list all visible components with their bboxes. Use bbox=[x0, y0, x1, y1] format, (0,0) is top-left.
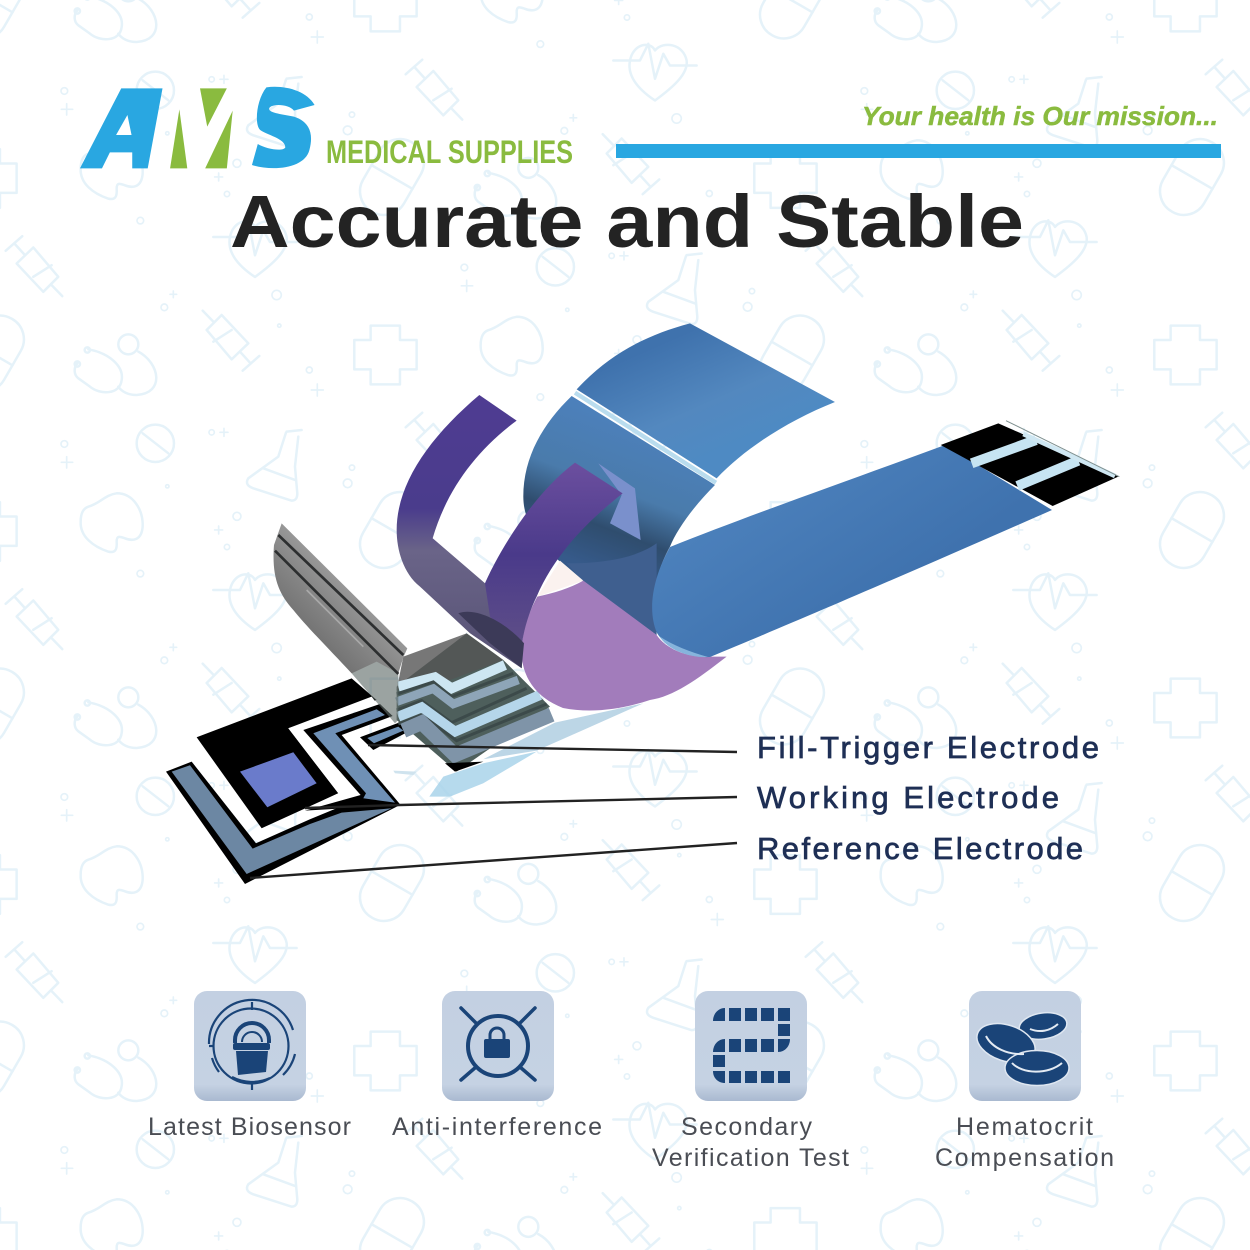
feature: secondary verification test bbox=[652, 991, 849, 1172]
caption: secondary verification test: Verification Test bbox=[652, 1144, 849, 1172]
logo wordmark: MEDICAL SUPPLIES bbox=[326, 134, 573, 170]
logo mark letters bbox=[80, 87, 315, 168]
caption: hematocrit compensation: Compensation bbox=[935, 1144, 1114, 1172]
leader lines bbox=[250, 745, 737, 878]
front blue strip body bbox=[652, 445, 1052, 657]
caption: hematocrit compensation bbox=[935, 1113, 1114, 1172]
caption: hematocrit compensation: Hematocrit bbox=[956, 1113, 1093, 1141]
caption: latest biosensor: Latest Biosensor bbox=[148, 1113, 351, 1141]
grey folded layer bbox=[274, 523, 407, 723]
strip electrodes bbox=[166, 633, 643, 884]
title: Accurate and Stable bbox=[230, 180, 1024, 263]
roll highlight bbox=[659, 636, 708, 657]
feature: hematocrit compensation bbox=[935, 991, 1114, 1172]
feature: anti-interference bbox=[392, 991, 602, 1141]
electrode labels bbox=[757, 730, 1099, 866]
icon: padlock in crossed circle bbox=[442, 991, 554, 1101]
icon: biosensor bucket bbox=[194, 991, 306, 1101]
logo: AMS Medical Supplies bbox=[80, 87, 573, 170]
feature: latest biosensor bbox=[148, 991, 351, 1141]
caption: anti-interference: Anti-interference bbox=[392, 1113, 602, 1141]
header rule bbox=[616, 144, 1221, 158]
strip contact end bbox=[941, 421, 1119, 506]
caption: secondary verification test bbox=[652, 1113, 849, 1172]
icon: digit two of squares bbox=[695, 991, 807, 1101]
label: reference electrode: Reference Electrode bbox=[757, 831, 1083, 866]
label: fill-trigger electrode: Fill-Trigger Electrode bbox=[757, 730, 1099, 765]
test strip illustration bbox=[166, 323, 1119, 884]
blue and purple curled layers bbox=[397, 323, 835, 710]
caption: secondary verification test: Secondary bbox=[681, 1113, 812, 1141]
icon: red blood cells bbox=[969, 991, 1081, 1101]
tagline: Your health is Our mission... bbox=[862, 101, 1218, 131]
label: working electrode: Working Electrode bbox=[757, 780, 1059, 815]
